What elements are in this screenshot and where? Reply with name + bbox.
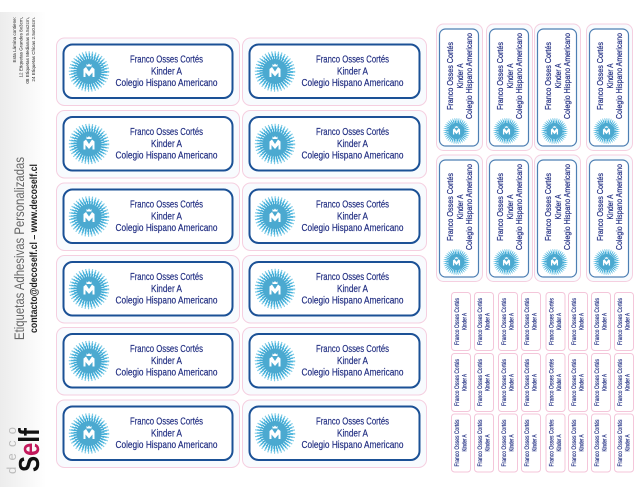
small label row 3, column 2	[474, 414, 494, 472]
large label 1: Franco Osses Cortés	[130, 54, 203, 66]
small label row 1, column 1: Franco Osses Cortés	[454, 297, 461, 345]
logo: decoSelf: deco	[4, 427, 19, 474]
large label 11: Colegio Hispano Americano	[116, 439, 218, 451]
large label 3: Kinder A	[151, 138, 182, 150]
large label 4: Kinder A	[337, 138, 368, 150]
small label row 3, column 7	[592, 414, 610, 472]
large label 1: Kinder A	[151, 66, 182, 78]
small label row 1, column 5: Kinder A	[556, 313, 563, 330]
medium label 2	[486, 24, 532, 150]
medium label 3: Kinder A	[553, 63, 563, 88]
large label 7: Kinder A	[151, 283, 182, 295]
large label 8: Kinder A	[337, 283, 368, 295]
medium label 5: Franco Osses Cortés	[445, 173, 455, 241]
medium label 6: Colegio Hispano Americano	[514, 164, 524, 250]
small label row 2, column 5	[546, 354, 565, 412]
small label row 2, column 6: Kinder A	[578, 374, 586, 391]
small label row 2, column 7: Kinder A	[602, 374, 608, 391]
large label 5: Kinder A	[151, 210, 182, 222]
medium label 1: Franco Osses Cortés	[445, 42, 455, 110]
contents note: Esta Lámina contiene:	[12, 17, 17, 62]
contents note: 24 Etiquetas Chicas 2.5x0.8cm.	[31, 17, 36, 82]
small label row 1, column 6: Franco Osses Cortés	[571, 297, 578, 345]
small label row 3, column 6	[568, 414, 588, 472]
medium label 2: Colegio Hispano Americano	[514, 33, 524, 119]
small label row 3, column 4	[522, 414, 540, 472]
large label 12: Kinder A	[337, 428, 368, 440]
small label row 1, column 1: Kinder A	[462, 313, 468, 330]
medium label 6: Franco Osses Cortés	[495, 173, 505, 241]
small label row 1, column 4	[522, 292, 540, 350]
small label row 2, column 8: Franco Osses Cortés	[617, 358, 624, 406]
medium label 4: Colegio Hispano Americano	[614, 33, 624, 119]
medium label 8: Colegio Hispano Americano	[614, 164, 624, 250]
small label row 1, column 8: Franco Osses Cortés	[617, 297, 624, 345]
large label 12: Colegio Hispano Americano	[302, 439, 404, 451]
small label row 3, column 8	[614, 414, 634, 472]
medium label 8	[586, 155, 632, 282]
large label 8: Colegio Hispano Americano	[302, 294, 404, 306]
large label 5: Colegio Hispano Americano	[116, 222, 218, 234]
medium label 3: Colegio Hispano Americano	[562, 33, 572, 119]
small label row 1, column 5	[546, 292, 565, 350]
large label 6: Kinder A	[337, 210, 368, 222]
contents note: 08 Etiquetas Medianas 5.5x2cm,	[25, 17, 30, 84]
small label row 1, column 7: Kinder A	[602, 313, 608, 330]
large label 6: Colegio Hispano Americano	[302, 222, 404, 234]
medium label 1: Colegio Hispano Americano	[464, 33, 474, 119]
small label row 3, column 2: Franco Osses Cortés	[477, 419, 484, 466]
large label 3: Franco Osses Cortés	[130, 126, 203, 138]
large label 6	[242, 183, 426, 250]
large label 7	[56, 256, 240, 323]
small label row 3, column 3: Franco Osses Cortés	[501, 419, 508, 466]
large label 9: Kinder A	[151, 355, 182, 367]
small label row 3, column 7: Franco Osses Cortés	[594, 419, 601, 466]
large label 12: Franco Osses Cortés	[316, 416, 389, 428]
small label row 1, column 5: Franco Osses Cortés	[548, 297, 556, 345]
small label row 2, column 4: Franco Osses Cortés	[524, 358, 531, 406]
medium label 7: Colegio Hispano Americano	[562, 164, 572, 250]
medium label 2: Franco Osses Cortés	[495, 42, 505, 110]
small label row 2, column 6	[568, 354, 588, 412]
medium label 8: Kinder A	[605, 194, 615, 220]
small label row 2, column 2: Kinder A	[484, 374, 492, 391]
large label 2: Franco Osses Cortés	[316, 54, 389, 66]
small label row 3, column 6: Franco Osses Cortés	[571, 419, 578, 466]
medium label 4	[586, 24, 632, 150]
medium label 4: Franco Osses Cortés	[595, 42, 605, 110]
small label row 1, column 7	[592, 292, 610, 350]
contents note: 12 Etiquetas Grandes 8x3cm,	[18, 17, 24, 78]
medium label 5: Kinder A	[455, 194, 465, 220]
large label 6: Franco Osses Cortés	[316, 198, 389, 210]
large label 8: Franco Osses Cortés	[316, 271, 389, 283]
small label row 2, column 8	[614, 354, 634, 412]
small label row 3, column 5	[546, 414, 565, 472]
small label row 3, column 3: Kinder A	[508, 434, 516, 452]
large label 11: Franco Osses Cortés	[130, 416, 203, 428]
small label row 1, column 7: Franco Osses Cortés	[594, 297, 601, 345]
small label row 2, column 1: Franco Osses Cortés	[454, 358, 461, 406]
small label row 3, column 4: Franco Osses Cortés	[524, 419, 531, 466]
small label row 2, column 5: Franco Osses Cortés	[548, 358, 556, 406]
small label row 1, column 6	[568, 292, 588, 350]
small label row 2, column 4: Kinder A	[532, 374, 538, 391]
medium label 5: Colegio Hispano Americano	[464, 164, 474, 250]
small label row 2, column 4	[522, 354, 540, 412]
small label row 3, column 8: Kinder A	[624, 434, 632, 452]
medium label 1	[436, 24, 482, 150]
small label row 2, column 5: Kinder A	[556, 374, 563, 391]
small label row 2, column 6: Franco Osses Cortés	[571, 358, 578, 406]
large label 7: Franco Osses Cortés	[130, 271, 203, 283]
medium label 6: Kinder A	[505, 194, 515, 220]
sheet heading: Etiquetas Adhesivas Personalizadas	[11, 157, 27, 340]
medium label 3	[534, 24, 580, 150]
small label row 3, column 5: Franco Osses Cortés	[548, 419, 556, 466]
small label row 2, column 3: Kinder A	[508, 374, 516, 391]
small label row 2, column 3: Franco Osses Cortés	[501, 358, 508, 406]
small label row 1, column 4: Kinder A	[532, 313, 538, 330]
small label row 1, column 2: Franco Osses Cortés	[477, 297, 484, 345]
large label 11	[56, 400, 240, 468]
small label row 1, column 8	[614, 292, 634, 350]
medium label 3: Franco Osses Cortés	[543, 42, 553, 110]
small label row 2, column 2	[474, 354, 494, 412]
small label row 3, column 4: Kinder A	[532, 434, 538, 452]
small label row 2, column 1: Kinder A	[462, 374, 468, 391]
large label 5: Franco Osses Cortés	[130, 198, 203, 210]
logo: decoSelf: Self	[14, 428, 46, 472]
large label 4	[242, 110, 426, 178]
small label row 1, column 6: Kinder A	[578, 313, 586, 330]
large label 3	[56, 110, 240, 178]
medium label 5	[436, 155, 482, 282]
small label row 3, column 8: Franco Osses Cortés	[617, 419, 624, 466]
small label row 1, column 4: Franco Osses Cortés	[524, 297, 531, 345]
small label row 3, column 7: Kinder A	[602, 434, 608, 452]
small label row 3, column 5: Kinder A	[556, 434, 563, 452]
large label 10: Colegio Hispano Americano	[302, 366, 404, 378]
large label 12	[242, 400, 426, 468]
small label row 3, column 1	[452, 414, 470, 472]
medium label 7: Franco Osses Cortés	[543, 173, 553, 241]
large label 10: Kinder A	[337, 355, 368, 367]
small label row 2, column 2: Franco Osses Cortés	[477, 358, 484, 406]
medium label 1: Kinder A	[455, 63, 465, 88]
small label row 1, column 2	[474, 292, 494, 350]
small label row 2, column 3	[498, 354, 518, 412]
medium label 7: Kinder A	[553, 194, 563, 220]
large label 4: Franco Osses Cortés	[316, 126, 389, 138]
small label row 1, column 1	[452, 292, 470, 350]
contact line: contacto@decoself.cl – www.decoself.cl	[28, 164, 40, 333]
contents note	[12, 17, 36, 84]
small label row 2, column 1	[452, 354, 470, 412]
large label 1	[56, 38, 240, 106]
large label 5	[56, 183, 240, 250]
left side gradient strip	[0, 12, 46, 487]
small label row 3, column 2: Kinder A	[484, 434, 492, 452]
small label row 1, column 3: Kinder A	[508, 313, 516, 330]
small label row 3, column 1: Franco Osses Cortés	[454, 419, 461, 466]
large label 7: Colegio Hispano Americano	[116, 294, 218, 306]
medium label 8: Franco Osses Cortés	[595, 173, 605, 241]
small label row 1, column 3	[498, 292, 518, 350]
large label 9: Franco Osses Cortés	[130, 343, 203, 355]
large label 2: Kinder A	[337, 66, 368, 78]
large label 2: Colegio Hispano Americano	[302, 77, 404, 89]
small label row 3, column 1: Kinder A	[462, 434, 468, 452]
small label row 3, column 6: Kinder A	[578, 434, 586, 452]
large label 3: Colegio Hispano Americano	[116, 150, 218, 162]
large label 1: Colegio Hispano Americano	[116, 77, 218, 89]
small label row 2, column 8: Kinder A	[624, 374, 632, 391]
large label 11: Kinder A	[151, 428, 182, 440]
large label 2	[242, 38, 426, 106]
small label row 2, column 7: Franco Osses Cortés	[594, 358, 601, 406]
small label row 1, column 2: Kinder A	[484, 313, 492, 330]
small label row 3, column 3	[498, 414, 518, 472]
medium label 6	[486, 155, 532, 282]
small label row 2, column 7	[592, 354, 610, 412]
medium label 7	[534, 155, 580, 282]
large label 8	[242, 256, 426, 323]
large label 9: Colegio Hispano Americano	[116, 366, 218, 378]
medium label 4: Kinder A	[605, 63, 615, 88]
large label 4: Colegio Hispano Americano	[302, 150, 404, 162]
large label 10	[242, 328, 426, 395]
large label 10: Franco Osses Cortés	[316, 343, 389, 355]
large label 9	[56, 328, 240, 395]
small label row 1, column 8: Kinder A	[624, 313, 632, 330]
medium label 2: Kinder A	[505, 63, 515, 88]
small label row 1, column 3: Franco Osses Cortés	[501, 297, 508, 345]
